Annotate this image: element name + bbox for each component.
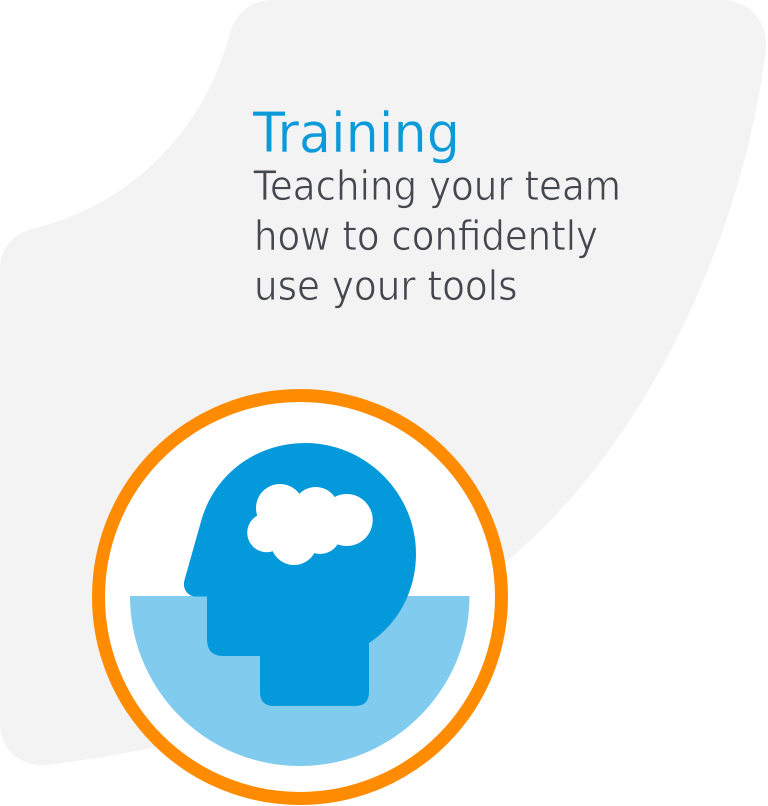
- text block: description: use your tools: [254, 262, 518, 310]
- icon: light blue half circle: [130, 596, 470, 766]
- icon: head silhouette: [184, 443, 416, 706]
- icon: white cloud: [247, 484, 373, 565]
- text block: description: Teaching your team: [253, 162, 621, 210]
- icon: orange ring: [98, 396, 502, 798]
- text block: description: how to confidently: [254, 212, 598, 260]
- text block: description: [253, 162, 621, 310]
- heading: Training: Training: [252, 101, 460, 165]
